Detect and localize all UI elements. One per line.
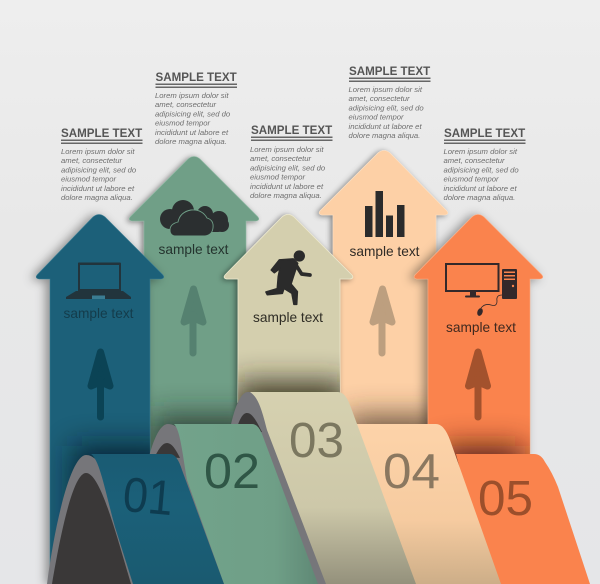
- ribbon 01: [47, 454, 224, 584]
- label: sample text 1: sample text: [64, 306, 134, 321]
- text block 4: adipisicing elit, sed do: [348, 103, 424, 112]
- text block 1: dolore magna aliqua.: [61, 193, 133, 202]
- icon: clouds: [160, 200, 229, 236]
- text block 3: adipisicing elit, sed do: [250, 163, 326, 172]
- number 02: 02: [204, 445, 260, 499]
- up arrow 1: [91, 352, 110, 417]
- text block 4: [348, 65, 430, 140]
- arrow 1: teal: [36, 214, 172, 584]
- up arrow 4: [373, 289, 392, 353]
- text block 1: eiusmod tempor: [61, 175, 117, 184]
- text block 1: SAMPLE TEXT: [61, 127, 142, 140]
- ribbon 04: [355, 424, 501, 584]
- text block 3: dolore magna aliqua.: [250, 191, 322, 200]
- ribbon 03: [228, 392, 416, 584]
- text block 1: Lorem ipsum dolor sit: [61, 147, 135, 156]
- text block 5: SAMPLE TEXT: [444, 127, 525, 140]
- text block 2: SAMPLE TEXT: [156, 71, 237, 84]
- text block 2: amet, consectetur: [155, 100, 217, 109]
- up arrow 2: [184, 289, 203, 353]
- text block 5: dolore magna aliqua.: [444, 193, 515, 202]
- text block 5: [444, 127, 526, 202]
- arrow 4: peach: [314, 148, 449, 424]
- text block 4: incididunt ut labore et: [348, 122, 422, 131]
- text block 1: amet, consectetur: [61, 156, 123, 165]
- text block 4: SAMPLE TEXT: [349, 65, 430, 78]
- text block 2: Lorem ipsum dolor sit: [155, 91, 229, 100]
- text block 5: eiusmod tempor: [444, 175, 499, 184]
- label: sample text 2: sample text: [158, 242, 229, 257]
- number 01: 01: [121, 468, 175, 526]
- text block 5: amet, consectetur: [444, 156, 505, 165]
- text block 4: Lorem ipsum dolor sit: [348, 85, 423, 94]
- icon: running figure: [266, 250, 310, 304]
- up arrow 5: [468, 352, 488, 417]
- text block 4: amet, consectetur: [348, 94, 410, 103]
- icon: laptop: [66, 262, 131, 299]
- ribbon 02: [146, 424, 318, 584]
- label: sample text 5: sample text: [446, 320, 516, 335]
- icon: bar chart: [365, 191, 404, 237]
- text block 2: [155, 71, 237, 146]
- text block 3: SAMPLE TEXT: [251, 124, 332, 137]
- text block 3: amet, consectetur: [250, 154, 312, 163]
- text block 1: incididunt ut labore et: [61, 184, 135, 193]
- label: sample text 4: sample text: [350, 244, 420, 259]
- text block 1: [61, 127, 142, 202]
- text block 5: adipisicing elit, sed do: [444, 165, 519, 174]
- icon: desktop computer: [446, 264, 517, 317]
- text block 3: incididunt ut labore et: [250, 182, 324, 191]
- text block 1: adipisicing elit, sed do: [61, 165, 137, 174]
- text block 3: Lorem ipsum dolor sit: [250, 145, 324, 154]
- text block 3: [250, 124, 332, 200]
- number 05: 05: [478, 472, 533, 526]
- text block 4: eiusmod tempor: [348, 113, 404, 122]
- text block 2: eiusmod tempor: [155, 119, 211, 128]
- ribbon 05: [456, 454, 590, 584]
- arrow 2: green: [129, 156, 260, 486]
- text block 2: dolore magna aliqua.: [155, 137, 227, 146]
- number 03: 03: [289, 414, 344, 468]
- label: sample text 3: sample text: [253, 310, 323, 325]
- text block 2: adipisicing elit, sed do: [155, 109, 231, 118]
- text block 4: dolore magna aliqua.: [348, 131, 420, 140]
- text block 3: eiusmod tempor: [250, 173, 306, 182]
- arrow 5: orange: [414, 214, 543, 506]
- number 04: 04: [383, 445, 440, 499]
- text block 5: Lorem ipsum dolor sit: [444, 147, 518, 156]
- arrow 3: khaki: [220, 212, 354, 415]
- text block 5: incididunt ut labore et: [444, 184, 517, 193]
- text block 2: incididunt ut labore et: [155, 128, 229, 137]
